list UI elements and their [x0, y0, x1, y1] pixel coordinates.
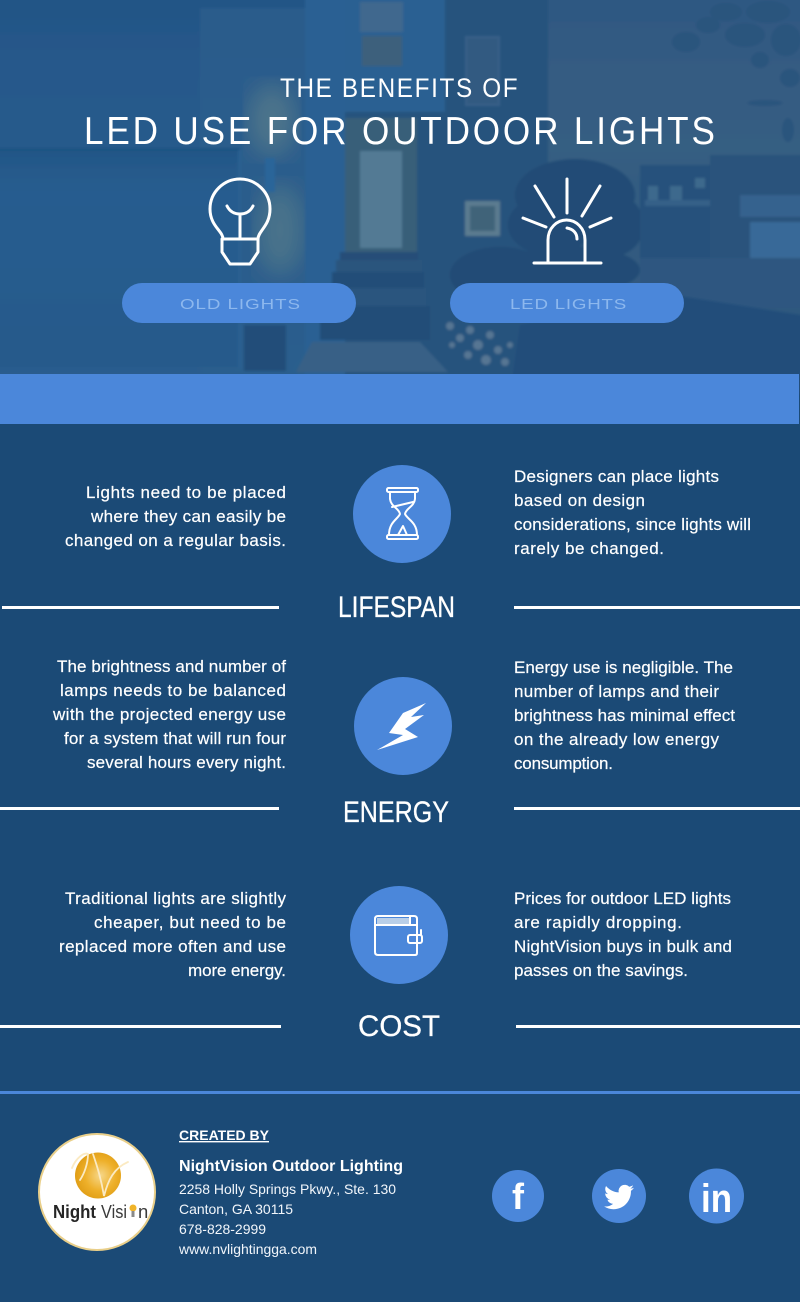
heading: energy: ENERGY: [343, 796, 449, 829]
text: LED lifespan: based on design: [514, 491, 645, 510]
text: LED energy: brightness has minimal effect: [514, 706, 735, 725]
text: LED cost: [514, 889, 732, 980]
panel: cost: [0, 886, 800, 1043]
text: old lights cost: Traditional lights are slightly: [65, 889, 286, 908]
logo: NightVision: n: [138, 1201, 148, 1222]
text: LED cost: NightVision buys in bulk and: [514, 937, 732, 956]
icon: facebook: f: [512, 1176, 525, 1217]
text: old lights cost: cheaper, but need to be: [94, 913, 286, 932]
title: LED USE FOR OUTDOOR LIGHTS: [84, 108, 715, 152]
logo: NightVision: [39, 1134, 155, 1250]
text: old lights energy: several hours every night.: [87, 753, 286, 772]
text: LED lifespan: rarely be changed.: [514, 539, 664, 558]
text: LED energy: number of lamps and their: [514, 682, 719, 701]
icon: facebook: [492, 1170, 544, 1222]
text: LED energy: on the already low energy: [514, 730, 720, 749]
text: LED lifespan: Designers can place lights: [514, 467, 719, 486]
address and contact details: 678-828-2999: [179, 1221, 266, 1237]
panel: energy: [0, 657, 800, 829]
text: old lights energy: The brightness and number of: [57, 657, 286, 676]
text: old lights lifespan: [65, 483, 286, 550]
blue band: [0, 374, 799, 424]
icon: linkedin: [689, 1168, 744, 1224]
heading: lifespan: LIFESPAN: [338, 591, 455, 624]
text: old lights energy: [52, 657, 286, 772]
footer: contact text: [178, 1127, 403, 1257]
heading: cost: COST: [358, 1010, 440, 1043]
icon: linkedin: in: [701, 1177, 732, 1221]
icon: twitter: [592, 1169, 646, 1223]
logo: NightVision: Night: [53, 1201, 96, 1222]
button: LED lights: LED LIGHTS: [510, 296, 626, 313]
panel: lifespan: [2, 465, 800, 624]
text: old lights cost: replaced more often and use: [59, 937, 286, 956]
address and contact details: 2258 Holly Springs Pkwy., Ste. 130: [179, 1181, 396, 1197]
logo: NightVision: Visi: [101, 1201, 127, 1222]
text: LED energy: [514, 658, 735, 773]
company name: NightVision Outdoor Lighting: [179, 1158, 403, 1175]
icon: hourglass: [353, 465, 451, 563]
title: [84, 74, 715, 152]
icon: lightning bolt: [354, 677, 452, 775]
text: LED cost: Prices for outdoor LED lights: [514, 889, 731, 908]
text: old lights energy: with the projected energy use: [52, 705, 286, 724]
text: old lights energy: lamps needs to be balanced: [60, 681, 286, 700]
text: LED cost: passes on the savings.: [514, 961, 688, 980]
address and contact details: www.nvlightingga.com: [178, 1241, 317, 1257]
button: old lights: [122, 283, 356, 323]
button: old lights: OLD LIGHTS: [180, 296, 300, 313]
button: LED lights: [450, 283, 684, 323]
text: LED lifespan: [514, 467, 751, 558]
created by heading: CREATED BY: [179, 1127, 270, 1143]
text: old lights cost: [59, 889, 286, 980]
header photo background: [0, 0, 800, 394]
title: THE BENEFITS OF: [280, 74, 518, 103]
icon: LED siren light: [523, 179, 611, 263]
text: old lights energy: for a system that will run four: [64, 729, 286, 748]
address and contact details: [178, 1181, 396, 1257]
text: old lights lifespan: changed on a regular basis.: [65, 531, 286, 550]
icon: wallet: [350, 886, 448, 984]
text: LED energy: consumption.: [514, 754, 613, 773]
text: old lights cost: more energy.: [188, 961, 286, 980]
icon: old light bulb: [210, 179, 270, 264]
text: LED lifespan: considerations, since lights will: [514, 515, 751, 534]
text: LED cost: are rapidly dropping.: [514, 913, 682, 932]
address and contact details: Canton, GA 30115: [179, 1201, 293, 1217]
text: old lights lifespan: where they can easily be: [90, 507, 286, 526]
text: LED energy: Energy use is negligible. The: [514, 658, 733, 677]
text: old lights lifespan: Lights need to be placed: [86, 483, 286, 502]
